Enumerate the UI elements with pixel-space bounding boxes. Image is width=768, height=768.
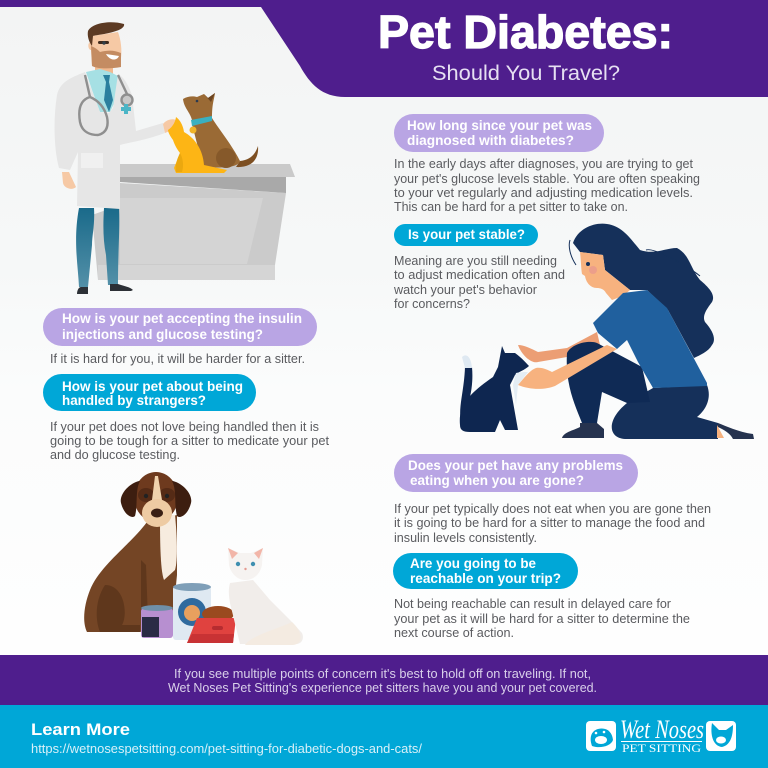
panel: conclusion band: If you see multiple points of concern it's best to hold off on traveling. If not,	[174, 667, 591, 681]
orange cat	[168, 117, 227, 173]
answer text: Not being reachable can result in delayed care for	[394, 596, 672, 611]
learn more link	[31, 721, 423, 756]
answer text: insulin levels consistently.	[394, 530, 537, 545]
answer text: for concerns?	[394, 296, 470, 311]
panel: conclusion band: Wet Noses Pet Sitting's experience pet sitters have you and your pet covered.	[168, 681, 597, 695]
question: eating problems: eating when you are gone?	[410, 473, 584, 488]
woman	[518, 224, 754, 439]
answer text: next course of action.	[394, 625, 514, 640]
blue food can	[173, 583, 211, 640]
question: is your pet stable: Is your pet stable?	[408, 227, 525, 242]
illustration: woman petting black cat	[460, 224, 754, 439]
brown dog	[84, 472, 191, 632]
answer text	[394, 156, 700, 214]
subtitle: Should You Travel?	[432, 62, 620, 85]
answer text	[394, 501, 711, 545]
answer text: In the early days after diagnoses, you are trying to get	[394, 156, 693, 171]
question: is your pet stable	[393, 224, 565, 311]
stethoscope	[79, 75, 132, 135]
question: accepting injections: injections and glucose testing?	[62, 327, 263, 342]
answer text	[393, 253, 565, 311]
answer text	[394, 596, 690, 640]
white cat	[228, 548, 303, 645]
question: eating problems: Does your pet have any problems	[408, 458, 623, 473]
logo: Wet Noses Pet Sitting: PET SITTING	[622, 741, 701, 755]
answer text: If your pet does not love being handled then it is	[50, 419, 319, 434]
answer text: your pet's glucose levels stable. You are often speaking	[394, 171, 700, 186]
answer text: If it is hard for you, it will be harder for a sitter.	[50, 351, 305, 366]
question: accepting injections	[43, 308, 317, 366]
illustration: dog, cat and food	[84, 472, 303, 645]
question: handled by strangers: How is your pet about being	[62, 379, 243, 394]
answer text: and do glucose testing.	[50, 447, 180, 462]
answer text: to your vet regularly and adjusting medication levels.	[394, 185, 693, 200]
icon: dog face	[586, 721, 616, 751]
logo: Wet Noses Pet Sitting: Wet Noses	[620, 715, 704, 744]
black cat	[460, 346, 529, 432]
answer text: to adjust medication often and	[394, 267, 565, 282]
question: how long since diagnosed: How long since your pet was	[407, 118, 592, 133]
learn more link: Learn More	[31, 721, 130, 739]
question: accepting injections: How is your pet accepting the insulin	[62, 311, 302, 326]
question: reachable on trip: Are you going to be	[410, 556, 536, 571]
answer text: your pet as it will be hard for a sitter to determine the	[394, 611, 690, 626]
question: handled by strangers	[43, 374, 329, 462]
question: handled by strangers: handled by strangers?	[62, 393, 206, 408]
panel: footer	[0, 705, 768, 768]
answer text: Meaning are you still needing	[394, 253, 557, 268]
panel: header	[0, 0, 768, 97]
learn more link: https://wetnosespetsitting.com/pet-sitting-for-diabetic-dogs-and-cats/	[31, 742, 423, 756]
title: Pet Diabetes:	[378, 6, 673, 58]
icon: cat face	[706, 721, 736, 751]
answer text: going to be tough for a sitter to medicate your pet	[50, 433, 329, 448]
illustration: vet with pets on exam table	[55, 22, 295, 294]
question: eating problems	[394, 454, 711, 545]
question: how long since diagnosed	[394, 114, 700, 214]
question: how long since diagnosed: diagnosed with diabetes?	[407, 133, 574, 148]
answer text: watch your pet's behavior	[393, 282, 538, 297]
logo: Wet Noses Pet Sitting	[586, 715, 736, 755]
exam table	[92, 164, 295, 280]
answer text	[50, 419, 329, 462]
food bowl	[187, 606, 236, 643]
answer text: it is going to be hard for a sitter to manage the food and	[394, 515, 705, 530]
dog on table	[183, 93, 258, 168]
question: reachable on trip: reachable on your trip?	[410, 571, 561, 586]
purple food can	[141, 605, 173, 638]
question: reachable on trip	[393, 553, 690, 640]
answer text: If your pet typically does not eat when you are gone then	[394, 501, 711, 516]
vet	[55, 22, 176, 294]
panel: conclusion band	[0, 655, 768, 705]
answer text: This can be hard for a pet sitter to take on.	[394, 199, 628, 214]
